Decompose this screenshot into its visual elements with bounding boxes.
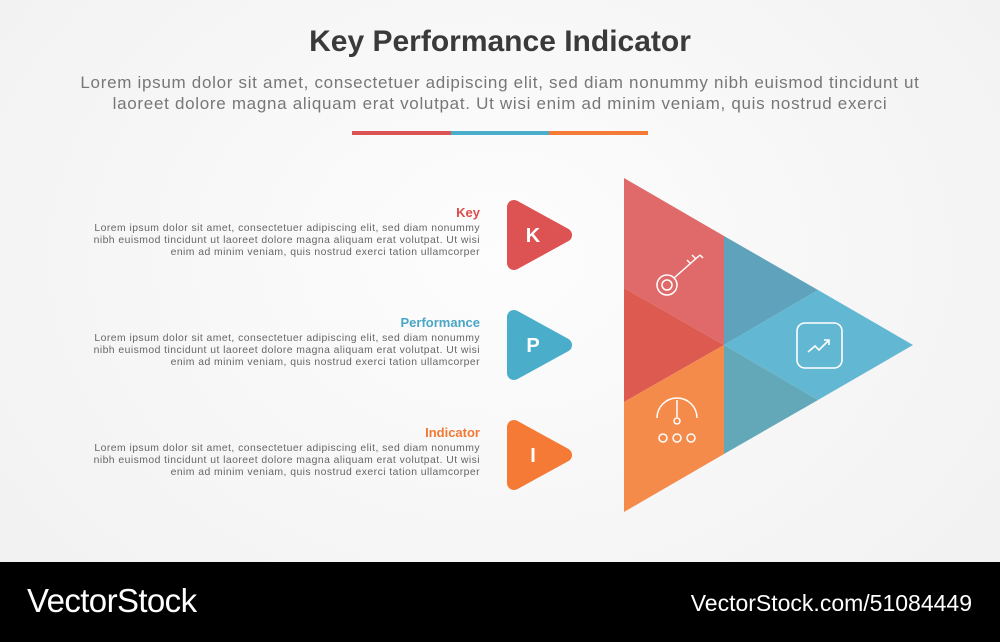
badge P: P [526,335,540,357]
big triangle [624,178,913,512]
footer bar [0,562,1000,642]
item: Indicator: Lorem ipsum dolor sit amet, consectetuer adipiscing elit, sed diam nonummy [94,443,480,454]
item: Key: enim ad minim veniam, quis nostrud exerci tation ullamcorper [171,247,480,258]
item: Indicator: nibh euismod tincidunt ut laoreet dolore magna aliquam erat volutpat. Ut wisi [94,455,480,466]
badge I: I [530,445,536,467]
item: Key: Lorem ipsum dolor sit amet, consectetuer adipiscing elit, sed diam nonummy [94,223,480,234]
item: Indicator: enim ad minim veniam, quis nostrud exerci tation ullamcorper [171,467,480,478]
icon: gauge [657,398,697,442]
item: Performance [94,315,480,368]
badge K: K [526,225,541,247]
subtitle: Lorem ipsum dolor sit amet, consectetuer adipiscing elit, sed diam nonummy nibh euismod tincidunt ut [80,73,920,92]
icon: chart [797,323,842,368]
footer url: VectorStock.com/51084449 [691,590,972,616]
icon: key [657,255,703,295]
item: Performance: Lorem ipsum dolor sit amet, consectetuer adipiscing elit, sed diam nonummy [94,333,480,344]
badge K [514,207,565,263]
item: Key: nibh euismod tincidunt ut laoreet dolore magna aliquam erat volutpat. Ut wisi [94,235,480,246]
item: Performance: Performance [401,315,480,330]
subtitle: laoreet dolore magna aliquam erat volutpat. Ut wisi enim ad minim veniam, quis nostrud exerci [113,94,887,113]
item: Performance: nibh euismod tincidunt ut laoreet dolore magna aliquam erat volutpat. Ut wisi [94,345,480,356]
title: Key Performance Indicator [309,25,691,58]
item: Key: Key [456,205,480,220]
item: Performance: enim ad minim veniam, quis nostrud exerci tation ullamcorper [171,357,480,368]
footer logo: VectorStock [27,582,196,619]
item: Indicator [94,425,480,478]
badge I [514,427,565,483]
subtitle [80,73,920,113]
color divider [352,131,648,135]
item: Indicator: Indicator [425,425,480,440]
item: Key [94,205,480,258]
badge P [514,317,565,373]
